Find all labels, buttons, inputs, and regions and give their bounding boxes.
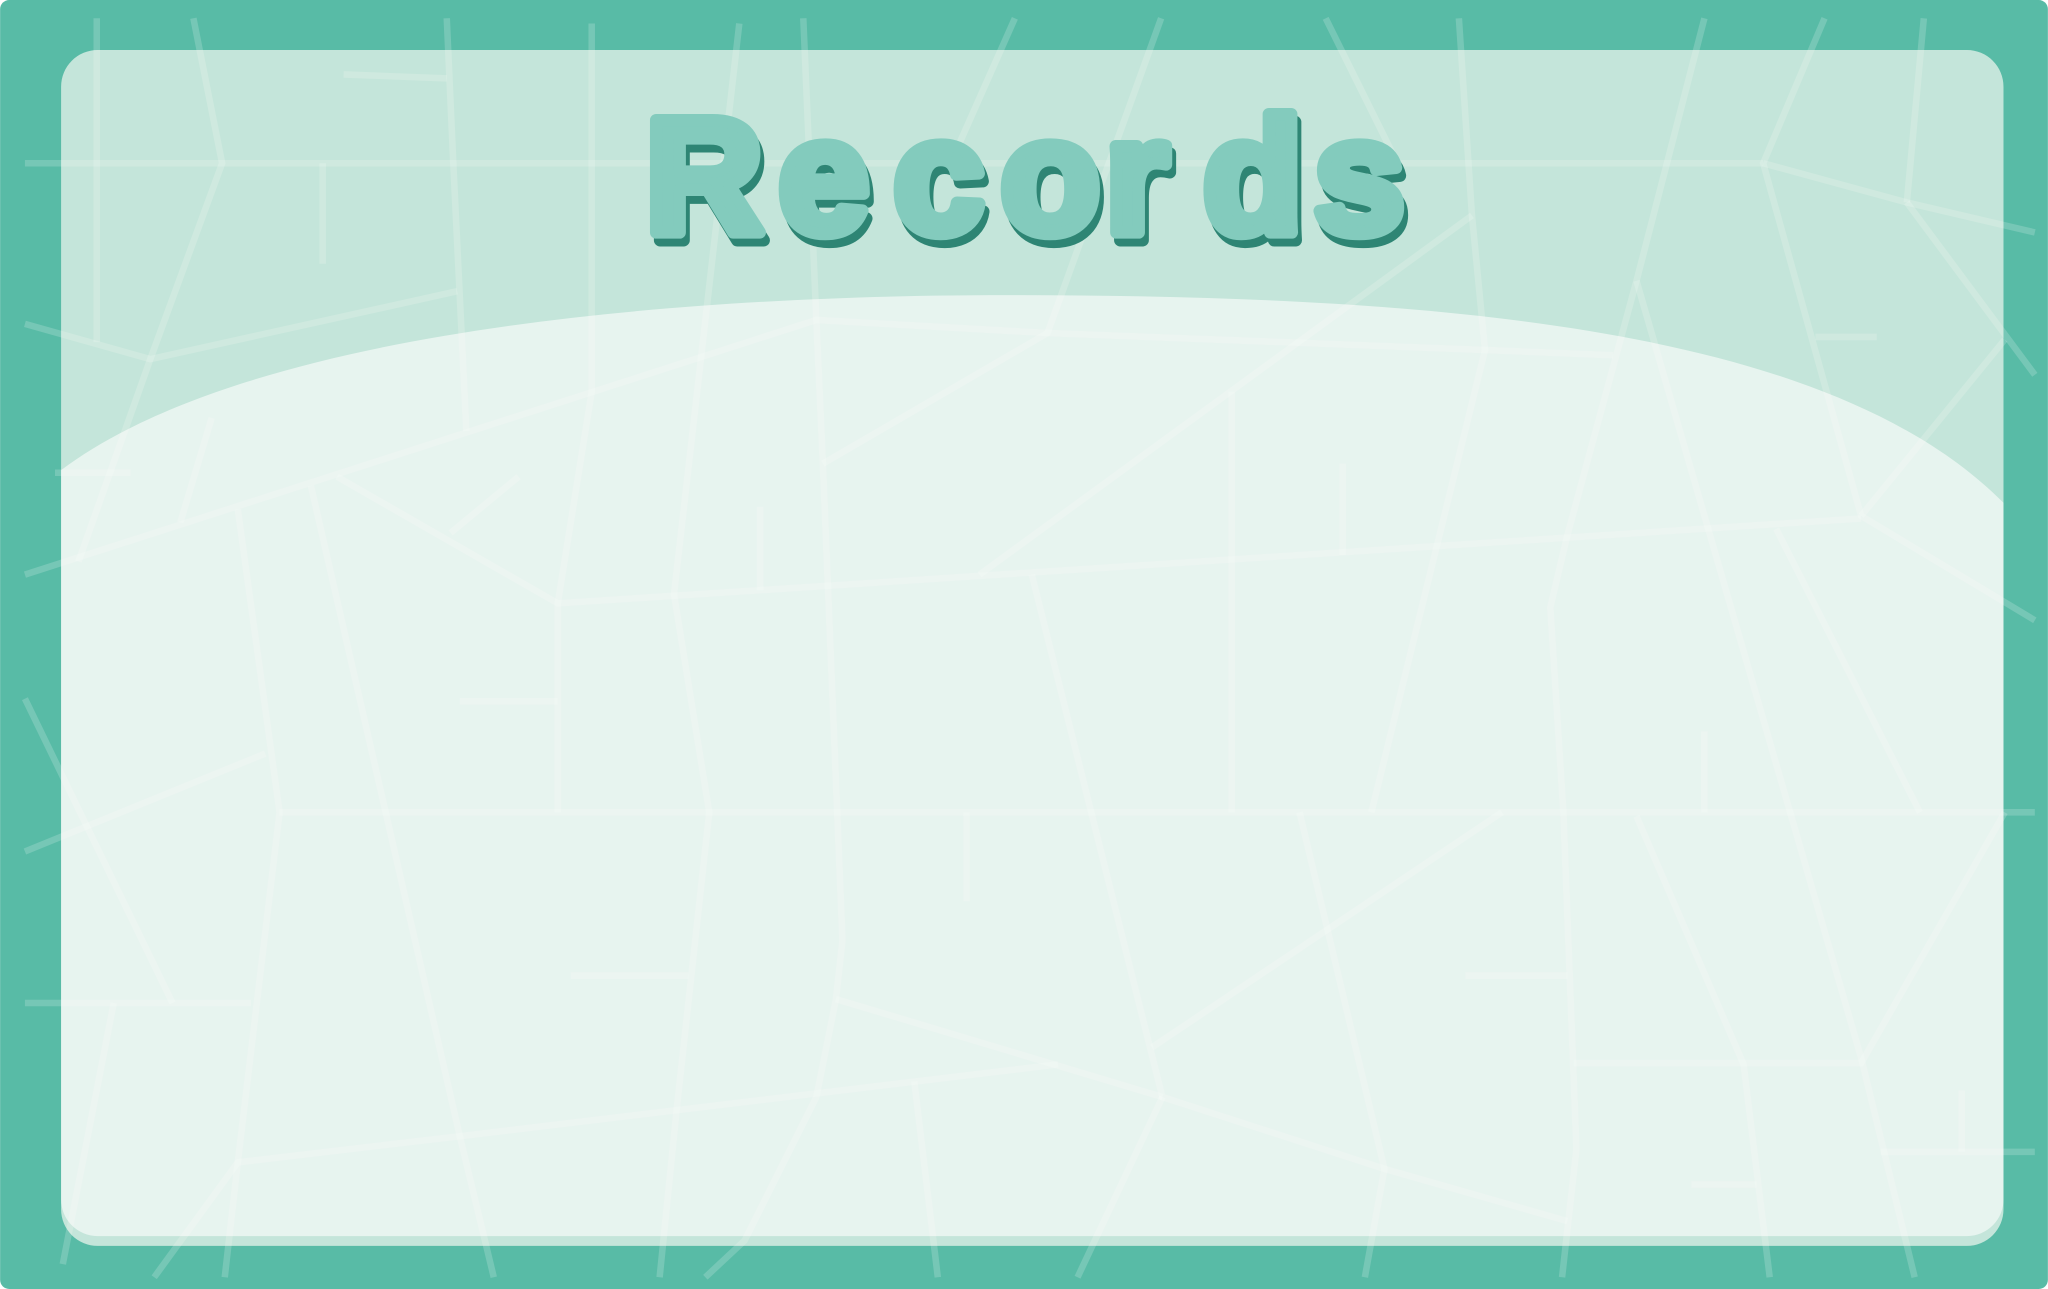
panel: curved content area xyxy=(61,295,2003,1236)
title: Records xyxy=(649,92,1409,275)
title: Records xyxy=(645,84,1405,267)
